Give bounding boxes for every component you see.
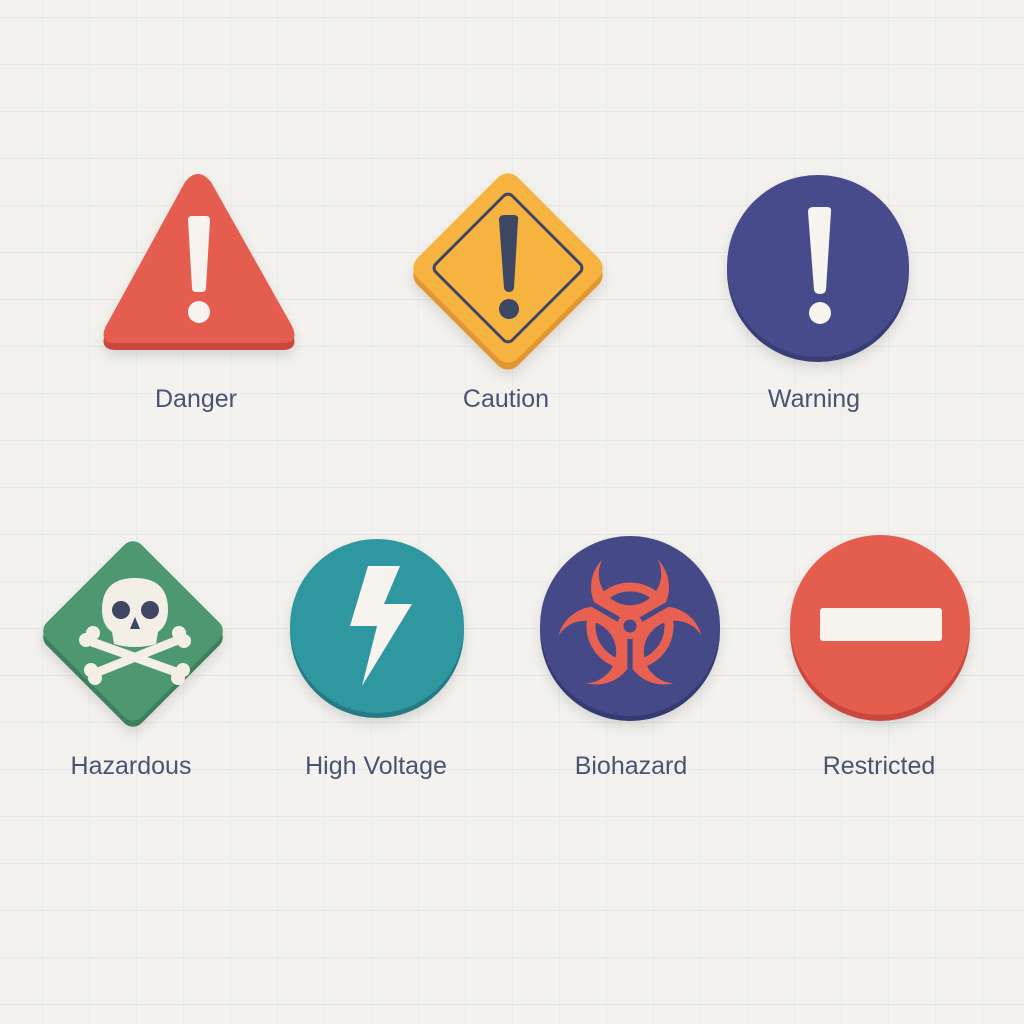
icon: warning circle xyxy=(727,175,909,362)
bones xyxy=(92,640,178,672)
icon: high voltage circle xyxy=(290,539,464,718)
icon: restricted circle xyxy=(790,535,970,721)
icon: caution diamond xyxy=(408,168,608,375)
label: Warning: Warning xyxy=(768,385,860,413)
label: Caution: Caution xyxy=(463,385,549,413)
icon: hazardous diamond xyxy=(38,536,228,732)
label: Biohazard: Biohazard xyxy=(575,752,687,780)
label: Restricted: Restricted xyxy=(823,752,935,780)
icon: biohazard circle xyxy=(540,536,720,721)
label: High Voltage: High Voltage xyxy=(305,752,447,780)
label: Hazardous: Hazardous xyxy=(71,752,191,780)
label: Danger: Danger xyxy=(155,385,237,413)
icon: danger triangle xyxy=(104,174,294,350)
skull xyxy=(102,578,168,647)
